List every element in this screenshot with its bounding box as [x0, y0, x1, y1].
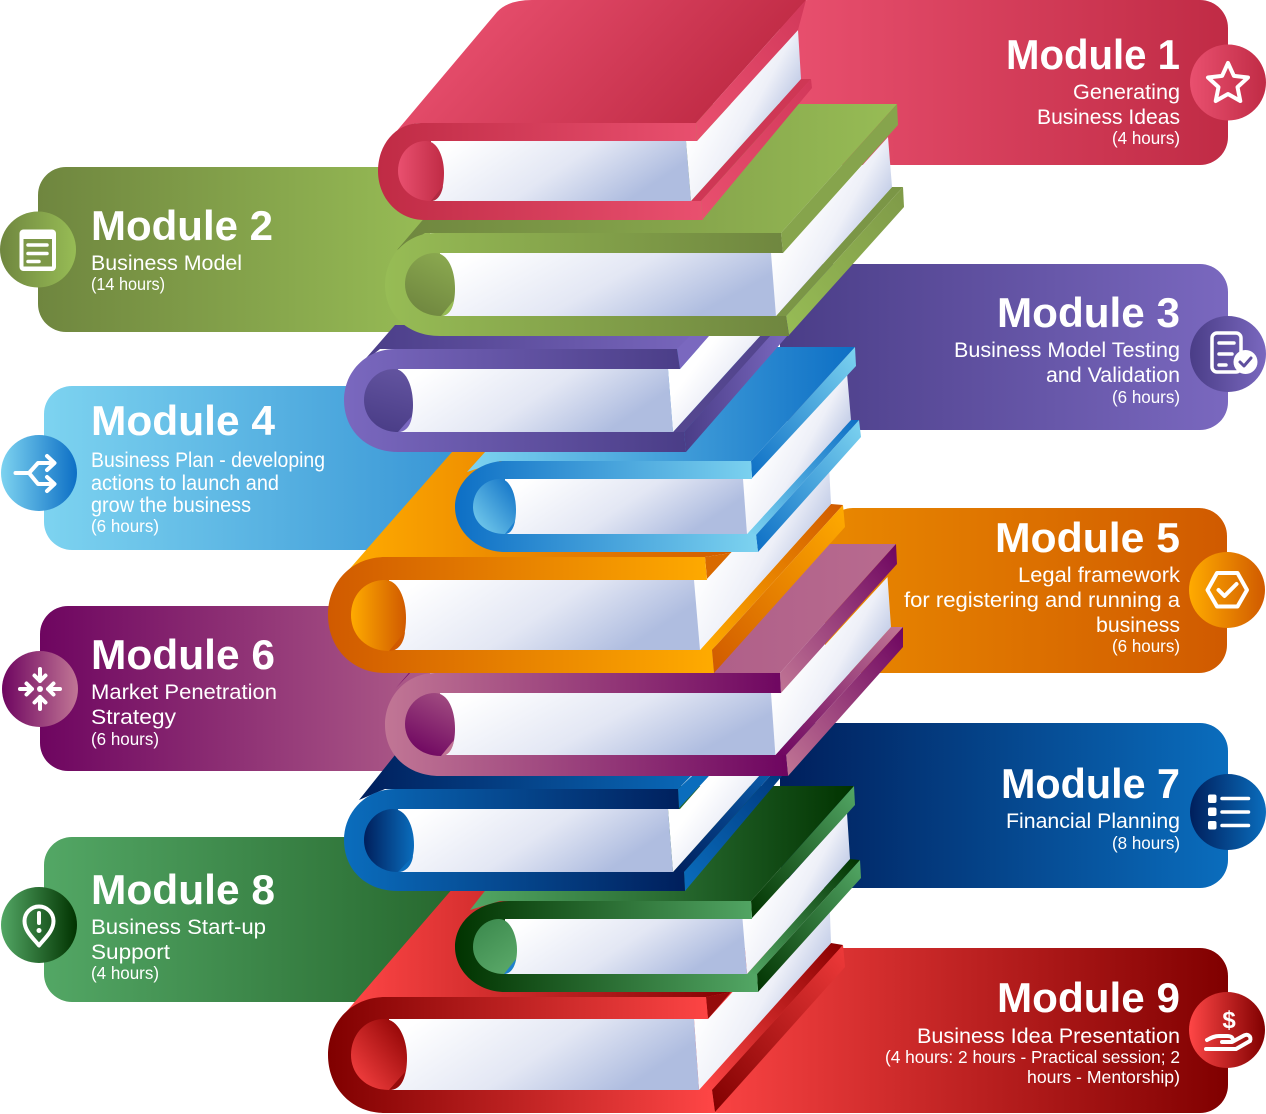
text: Module 8 description [91, 916, 266, 983]
icon: inward arrows [2, 651, 78, 727]
text: Module 3 description: and Validation [1046, 364, 1180, 387]
panel: Module 6 [2, 606, 430, 771]
heading: Module 2: Module 2 [91, 202, 273, 249]
book 6: magenta [385, 544, 903, 776]
heading: Module 8: Module 8 [91, 866, 275, 913]
heading: Module 9: Module 9 [997, 974, 1180, 1021]
text: Module 9 description: Business Idea Presentation [917, 1025, 1180, 1048]
text: Module 8 description: (4 hours) [91, 963, 159, 983]
icon: pin alert [1, 887, 77, 963]
book 2: green [385, 104, 904, 336]
text: Module 8 description: Support [91, 941, 170, 964]
text: Module 5 description: (6 hours) [1112, 636, 1180, 656]
text: Module 2 description: Business Model [91, 252, 242, 275]
panel: Module 8 [1, 837, 490, 1002]
book 3: purple [344, 325, 788, 452]
heading: Module 7: Module 7 [1001, 760, 1180, 807]
text: Module 4 description: Business Plan - developing [91, 449, 325, 472]
book 9: red [328, 880, 845, 1113]
text: Module 1 description [1037, 81, 1180, 148]
book 4: blue [455, 347, 861, 552]
text: Module 6 description [91, 681, 277, 749]
text: Module 1 description: Generating [1073, 81, 1180, 104]
heading: Module 3: Module 3 [997, 289, 1180, 336]
icon: hand with dollar: $ [1222, 1007, 1236, 1034]
text: Module 9 description [885, 1025, 1180, 1087]
text: Module 1 description: Business Ideas [1037, 106, 1180, 129]
icon: document [0, 212, 76, 288]
book 5: orange [328, 446, 845, 673]
panel: Module 7 [780, 723, 1266, 888]
panel: Module 3 [780, 264, 1266, 430]
text: Module 4 description: actions to launch and [91, 472, 279, 495]
heading: Module 4: Module 4 [91, 397, 276, 444]
text: Module 8 description: Business Start-up [91, 916, 266, 939]
heading: Module 6: Module 6 [91, 631, 275, 678]
text: Module 6 description: Strategy [91, 706, 177, 729]
panel: Module 1 [780, 0, 1266, 165]
text: Module 5 description: Legal framework [1018, 564, 1181, 587]
text: Module 3 description: (6 hours) [1112, 387, 1180, 407]
text: Module 7 description [1006, 810, 1180, 853]
text: Module 1 description: (4 hours) [1112, 128, 1180, 148]
text: Module 6 description: (6 hours) [91, 729, 159, 749]
text: Module 5 description: business [1096, 614, 1180, 637]
panel: Module 2 [0, 167, 430, 332]
icon: checked document [1190, 316, 1266, 392]
text: Module 9 description: hours - Mentorship) [1027, 1067, 1180, 1087]
text: Module 7 description: Financial Planning [1006, 810, 1180, 833]
icon: hexagon check [1189, 552, 1265, 628]
heading: Module 1: Module 1 [1006, 31, 1180, 78]
icon: list [1190, 774, 1266, 850]
text: Module 3 description [954, 339, 1180, 407]
panel: Module 4 [1, 386, 480, 550]
text: Module 5 description: for registering and running a [904, 589, 1180, 612]
icon: hand with dollar [1189, 992, 1265, 1068]
panel: Module 5 [825, 508, 1265, 673]
text: Module 3 description: Business Model Testing [954, 339, 1180, 362]
heading: Module 5: Module 5 [995, 514, 1180, 561]
text: Module 4 description: grow the business [91, 494, 251, 517]
text: Module 2 description: (14 hours) [91, 274, 165, 294]
panel: Module 9 [690, 948, 1265, 1113]
text: Module 2 description [91, 252, 242, 294]
book 1: crimson [378, 0, 812, 220]
text: Module 5 description [904, 564, 1181, 656]
icon: star [1190, 44, 1266, 120]
text: Module 7 description: (8 hours) [1112, 833, 1180, 853]
book 8: green [455, 786, 861, 992]
text: Module 9 description: (4 hours: 2 hours - Practical session; 2 [885, 1047, 1180, 1067]
icon: split arrows [1, 435, 77, 511]
text: Module 4 description: (6 hours) [91, 516, 159, 536]
text: Module 6 description: Market Penetration [91, 681, 277, 704]
book 7: navy blue [344, 755, 782, 891]
text: Module 4 description [91, 449, 325, 536]
